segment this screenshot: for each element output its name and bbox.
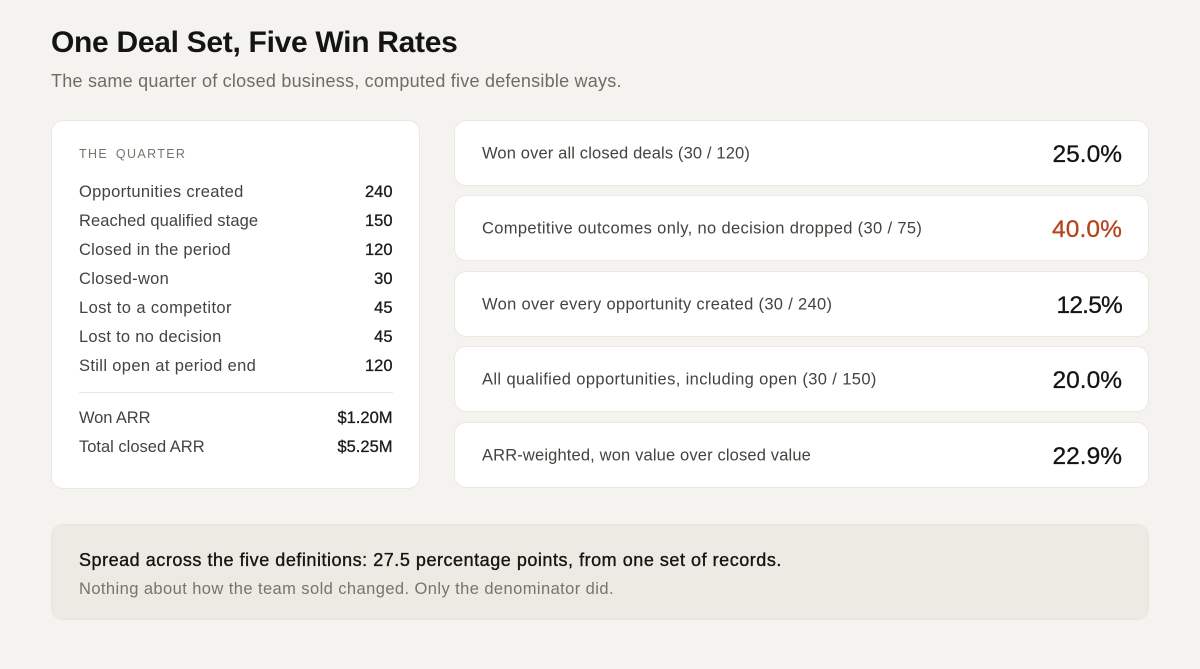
title: One Deal Set, Five Win Rates	[51, 26, 457, 59]
card: every opportunity created: Won over every opportunity created (30 / 240)	[482, 296, 832, 314]
row: still open at period end: Still open at period end	[79, 357, 256, 375]
row: reached qualified stage: 150	[365, 212, 392, 230]
row: closed-won: Closed-won	[79, 270, 169, 288]
row: opportunities created: 240	[365, 183, 392, 201]
row: total closed ARR	[79, 438, 392, 456]
card: competitive outcomes only	[454, 195, 1149, 261]
row: closed in the period	[79, 241, 392, 259]
card: won over all closed deals	[454, 120, 1149, 186]
row: opportunities created	[79, 183, 392, 201]
row: reached qualified stage: Reached qualified stage	[79, 212, 258, 230]
row: lost to a competitor: Lost to a competitor	[79, 299, 232, 317]
row: lost to a competitor: 45	[374, 299, 392, 317]
card: all qualified opportunities: All qualified opportunities, including open (30 / 150)	[482, 370, 877, 388]
row: closed-won	[79, 270, 392, 288]
row: total closed ARR: $5.25M	[337, 438, 392, 456]
row: closed in the period: Closed in the period	[79, 241, 231, 259]
row: lost to no decision: 45	[374, 328, 392, 346]
panel heading: THE QUARTER	[79, 147, 186, 161]
row: won ARR: Won ARR	[79, 409, 150, 427]
row: won ARR: $1.20M	[337, 409, 392, 427]
row: still open at period end	[79, 357, 392, 375]
card: won over all closed deals: Won over all closed deals (30 / 120)	[482, 144, 750, 162]
card: all qualified opportunities: 20.0%	[1053, 366, 1122, 394]
row: total closed ARR: Total closed ARR	[79, 438, 205, 456]
panel: the quarter	[51, 120, 420, 489]
card: every opportunity created	[454, 271, 1149, 337]
row: opportunities created: Opportunities created	[79, 183, 244, 201]
card: won over all closed deals: 25.0%	[1053, 140, 1122, 168]
row: won ARR	[79, 409, 392, 427]
row: lost to no decision: Lost to no decision	[79, 328, 222, 346]
card: competitive outcomes only: Competitive outcomes only, no decision dropped (30 / 75)	[482, 220, 922, 238]
card: every opportunity created: 12.5%	[1057, 292, 1122, 318]
callout note: Nothing about how the team sold changed. Only the denominator did.	[79, 580, 614, 598]
row: still open at period end: 120	[365, 357, 392, 375]
callout headline: Spread across the five definitions: 27.5 percentage points, from one set of records.	[79, 550, 782, 570]
row: lost to no decision	[79, 328, 392, 346]
card: competitive outcomes only: 40.0%	[1052, 216, 1122, 242]
card: ARR-weighted: ARR-weighted, won value over closed value	[482, 446, 811, 464]
row: lost to a competitor	[79, 299, 392, 317]
row: closed-won: 30	[374, 270, 392, 288]
card: ARR-weighted	[454, 422, 1149, 488]
callout: spread	[51, 524, 1149, 620]
subtitle: The same quarter of closed business, computed five defensible ways.	[51, 71, 622, 91]
card: all qualified opportunities	[454, 346, 1149, 412]
card: ARR-weighted: 22.9%	[1053, 442, 1122, 470]
row: reached qualified stage	[79, 212, 392, 230]
row: closed in the period: 120	[365, 241, 392, 259]
